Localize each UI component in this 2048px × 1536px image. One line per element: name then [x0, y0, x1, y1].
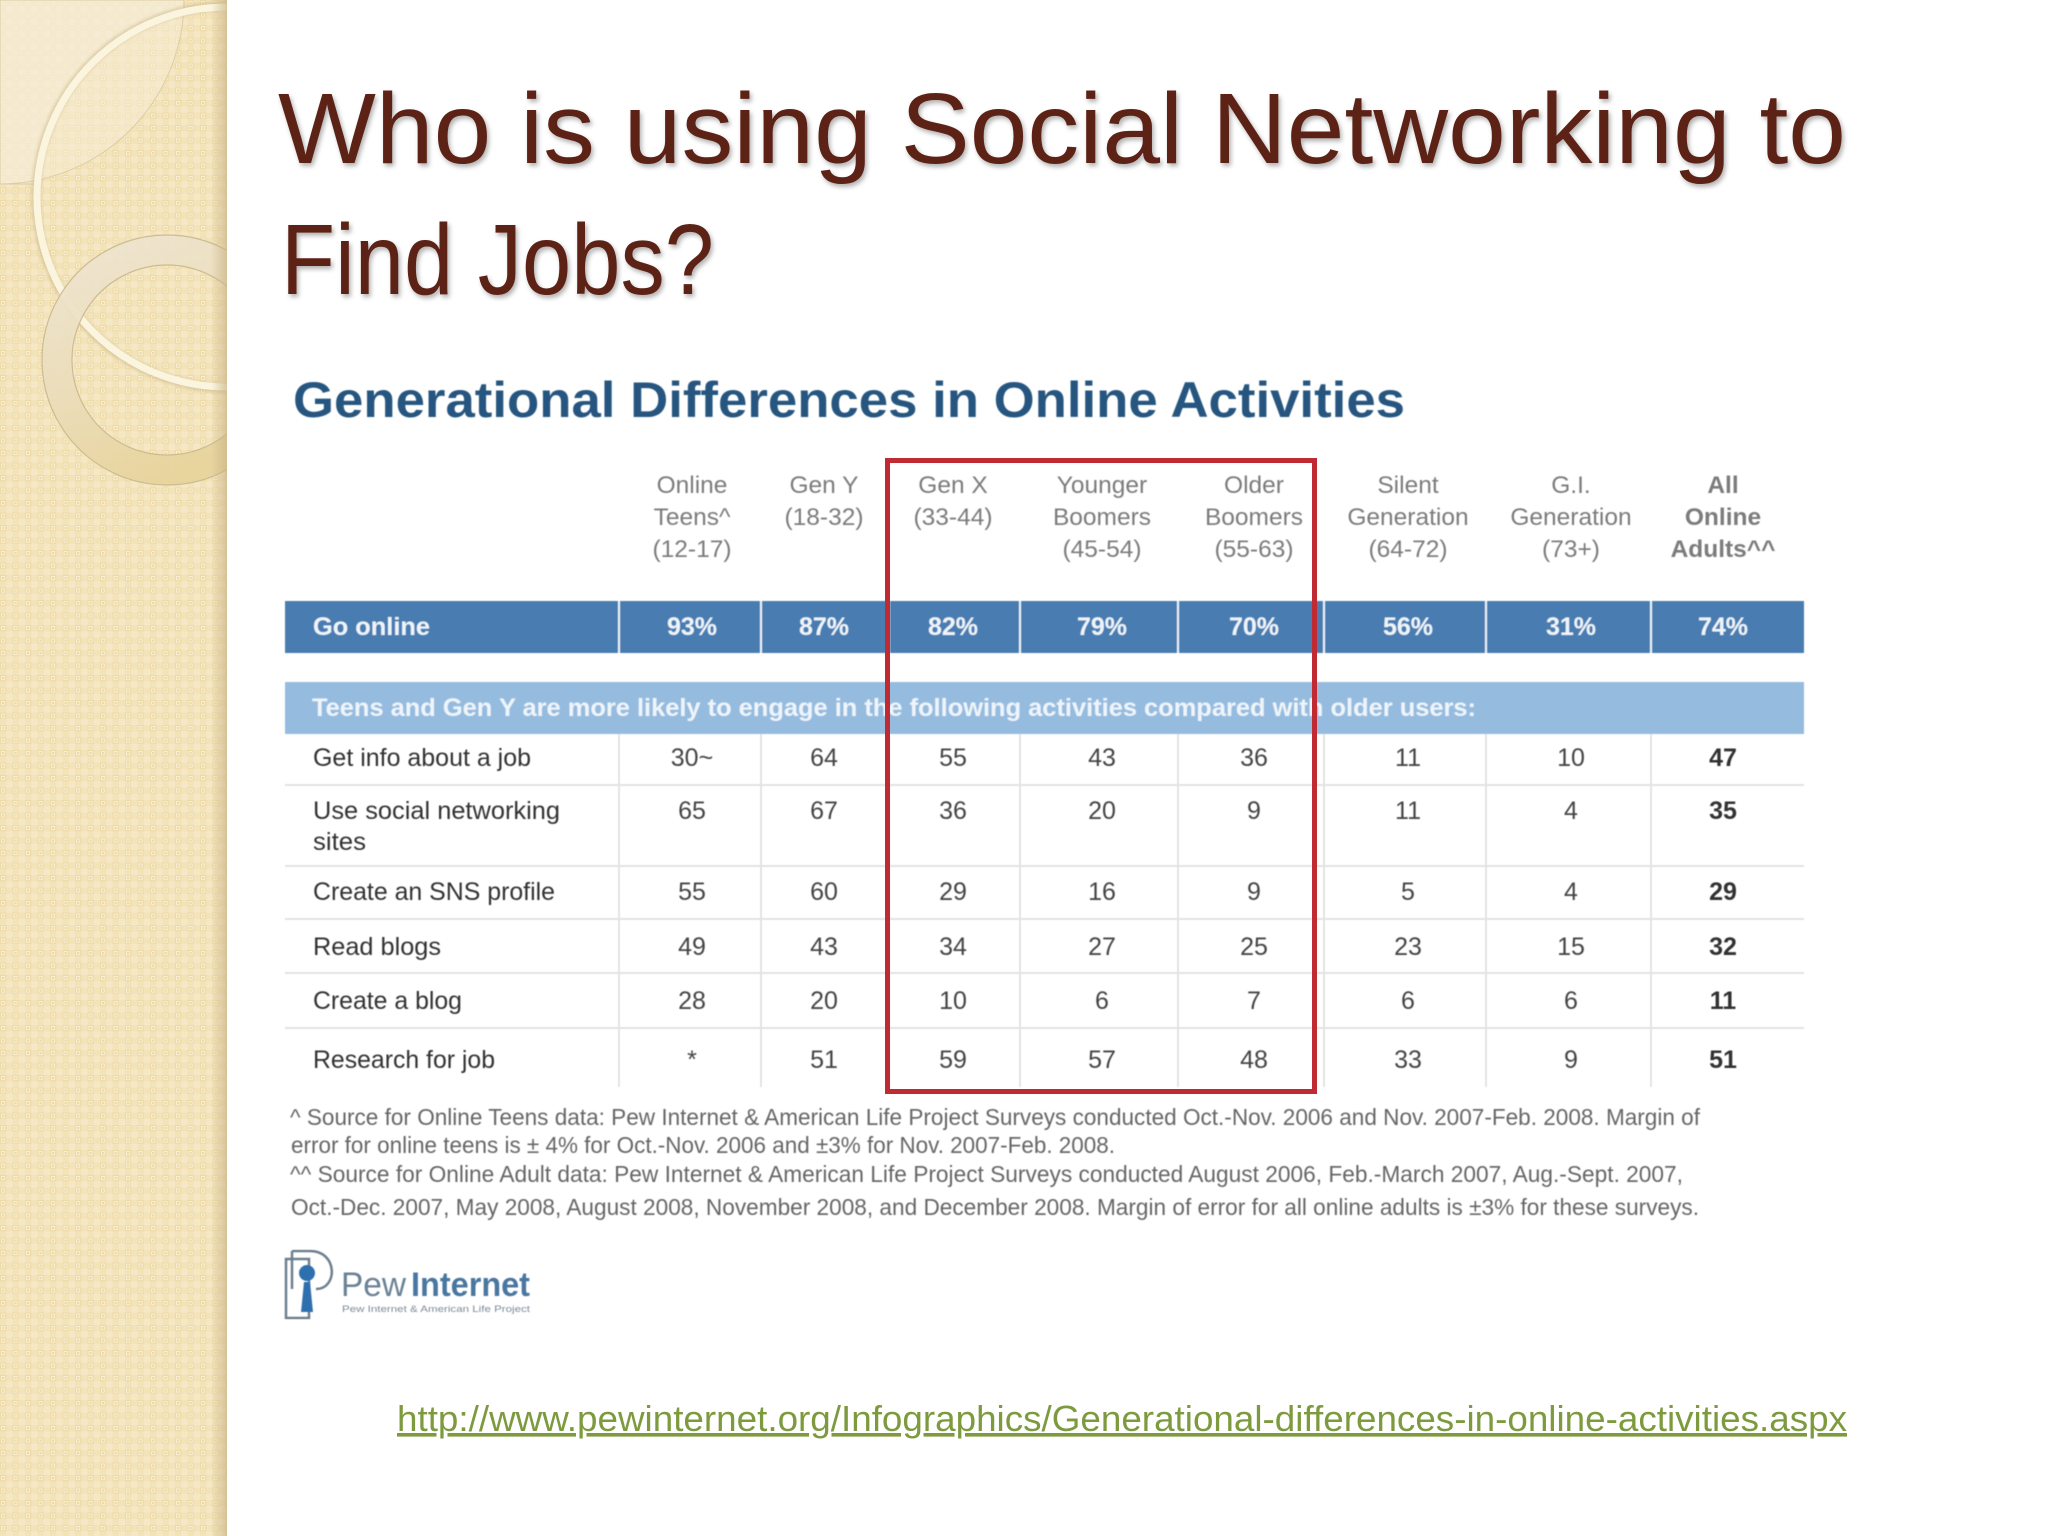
row: research for job — [313, 1046, 1737, 1074]
row: create an SNS profile: 29 — [1709, 878, 1737, 906]
go online row — [285, 601, 1804, 653]
row: research for job: 51 — [810, 1046, 838, 1074]
go online row: 82% — [928, 613, 978, 641]
column headers: Boomers — [1053, 504, 1151, 531]
column headers: Gen Y — [789, 472, 859, 499]
go online row: 93% — [667, 613, 717, 641]
row: read blogs: 23 — [1394, 933, 1422, 961]
row: create a blog: 7 — [1247, 987, 1261, 1015]
icon: Pew P mark — [286, 1251, 332, 1318]
column headers: Younger — [1057, 472, 1147, 499]
row: create a blog: 11 — [1710, 987, 1736, 1015]
source link: http://www.pewinternet.org/Infographics/Generational-differences-in-online-activities.aspx — [397, 1398, 1847, 1439]
column headers: Adults^^ — [1671, 536, 1775, 563]
row: research for job: 48 — [1240, 1046, 1268, 1074]
row: research for job: 33 — [1394, 1046, 1422, 1074]
footnotes: error for online teens is ± 4% for Oct.-Nov. 2006 and ±3% for Nov. 2007-Feb. 2008. — [291, 1132, 1115, 1158]
row: create a blog: Create a blog — [313, 987, 462, 1015]
row: read blogs: 34 — [939, 933, 967, 961]
row: research for job: * — [687, 1046, 697, 1074]
row: get info about a job: 64 — [810, 744, 838, 772]
footnotes: ^ Source for Online Teens data: Pew Internet & American Life Project Surveys conducted Oct.-Nov. 2006 and Nov. 2007-Feb. 2008. Margin of — [290, 1104, 1701, 1130]
row: create a blog: 28 — [678, 987, 706, 1015]
decorative sidebar panel — [0, 0, 227, 1536]
column headers: (73+) — [1542, 536, 1600, 563]
title: Find Jobs? — [281, 204, 714, 316]
title — [278, 73, 1846, 316]
thick ring — [41, 234, 227, 486]
row: create an SNS profile: 9 — [1247, 878, 1261, 906]
row: get info about a job: 10 — [1557, 744, 1585, 772]
row: get info about a job: Get info about a job — [313, 744, 531, 772]
row: create an SNS profile: 29 — [939, 878, 967, 906]
row: create a blog: 20 — [810, 987, 838, 1015]
go online row: 74% — [1698, 613, 1748, 641]
row: use social networking sites: Use social networking — [313, 797, 560, 825]
row: use social networking sites: 20 — [1088, 797, 1116, 825]
column headers: Online — [657, 472, 727, 499]
row: read blogs: 32 — [1709, 933, 1737, 961]
subheader band: Teens and Gen Y are more likely to engage in the following activities compared with older users: — [312, 694, 1476, 722]
footnotes — [290, 1104, 1701, 1220]
column headers: (45-54) — [1063, 536, 1141, 563]
row: read blogs — [313, 933, 1737, 961]
row: research for job: 51 — [1709, 1046, 1737, 1074]
row: use social networking sites: 65 — [678, 797, 706, 825]
row: get info about a job: 43 — [1088, 744, 1116, 772]
row: read blogs: 25 — [1240, 933, 1268, 961]
row: create an SNS profile: 55 — [678, 878, 706, 906]
logo wordmark bold: Internet — [411, 1266, 530, 1304]
row: use social networking sites: 67 — [810, 797, 838, 825]
row: use social networking sites: sites — [313, 828, 366, 856]
column headers: Older — [1224, 472, 1284, 499]
row: research for job: Research for job — [313, 1046, 495, 1074]
row: get info about a job: 47 — [1709, 744, 1737, 772]
column headers: (33-44) — [914, 504, 992, 531]
column headers: G.I. — [1551, 472, 1591, 499]
row: create an SNS profile: 60 — [810, 878, 838, 906]
column headers: Silent — [1377, 472, 1439, 499]
column headers: (64-72) — [1369, 536, 1447, 563]
row: create an SNS profile: 16 — [1088, 878, 1116, 906]
row: use social networking sites: 35 — [1709, 797, 1737, 825]
logo: Pew Internet — [286, 1251, 530, 1318]
row: research for job: 9 — [1564, 1046, 1578, 1074]
light lens shape — [0, 0, 184, 184]
subheader band — [285, 682, 1804, 734]
go online row: 56% — [1383, 613, 1433, 641]
row: create a blog: 6 — [1095, 987, 1109, 1015]
row: research for job: 59 — [939, 1046, 967, 1074]
row: read blogs: 15 — [1557, 933, 1585, 961]
column headers: (55-63) — [1215, 536, 1293, 563]
row: use social networking sites — [313, 797, 1737, 856]
column headers — [653, 472, 1775, 563]
go online row: 70% — [1229, 613, 1279, 641]
row: create an SNS profile: Create an SNS profile — [313, 878, 555, 906]
row: use social networking sites: 11 — [1395, 797, 1421, 825]
column headers: Generation — [1510, 504, 1632, 531]
row: get info about a job: 36 — [1240, 744, 1268, 772]
column headers: All — [1707, 472, 1739, 499]
red highlight box — [888, 460, 1314, 1092]
row: use social networking sites: 9 — [1247, 797, 1261, 825]
row: create a blog: 6 — [1564, 987, 1578, 1015]
row: get info about a job — [313, 744, 1737, 772]
footnotes: Oct.-Dec. 2007, May 2008, August 2008, November 2008, and December 2008. Margin of error for all online adults is ±3% for these surveys. — [291, 1194, 1699, 1220]
row: create a blog: 10 — [939, 987, 967, 1015]
row: get info about a job: 11 — [1395, 744, 1421, 772]
column headers: Teens^ — [654, 504, 731, 531]
row: create an SNS profile: 4 — [1564, 878, 1578, 906]
title: Who is using Social Networking to — [278, 73, 1846, 185]
go online row: Go online — [313, 613, 430, 641]
logo wordmark: Pew — [341, 1266, 406, 1304]
row: read blogs: 43 — [810, 933, 838, 961]
row: create a blog — [313, 987, 1736, 1015]
row: use social networking sites: 36 — [939, 797, 967, 825]
column headers: (18-32) — [785, 504, 863, 531]
column headers: Boomers — [1205, 504, 1303, 531]
row: create an SNS profile: 5 — [1401, 878, 1415, 906]
chart heading: Generational Differences in Online Activities — [293, 372, 1405, 428]
logo tagline: Pew Internet & American Life Project — [342, 1304, 530, 1315]
row: read blogs: Read blogs — [313, 933, 441, 961]
go online row: 31% — [1546, 613, 1596, 641]
row: create an SNS profile — [313, 878, 1737, 906]
row: read blogs: 27 — [1088, 933, 1116, 961]
column headers: (12-17) — [653, 536, 731, 563]
data table — [285, 472, 1804, 1087]
column headers: Gen X — [918, 472, 988, 499]
large thin ring — [30, 1, 227, 393]
row: read blogs: 49 — [678, 933, 706, 961]
row: research for job: 57 — [1088, 1046, 1116, 1074]
row: get info about a job: 55 — [939, 744, 967, 772]
row: get info about a job: 30~ — [671, 744, 713, 772]
go online row: 87% — [799, 613, 849, 641]
footnotes: ^^ Source for Online Adult data: Pew Internet & American Life Project Surveys conducted August 2006, Feb.-March 2007, Aug.-Sept. 2007, — [290, 1161, 1683, 1187]
row: create a blog: 6 — [1401, 987, 1415, 1015]
go online row: 79% — [1077, 613, 1127, 641]
row: use social networking sites: 4 — [1564, 797, 1578, 825]
column headers: Generation — [1347, 504, 1469, 531]
column headers: Online — [1685, 504, 1761, 531]
